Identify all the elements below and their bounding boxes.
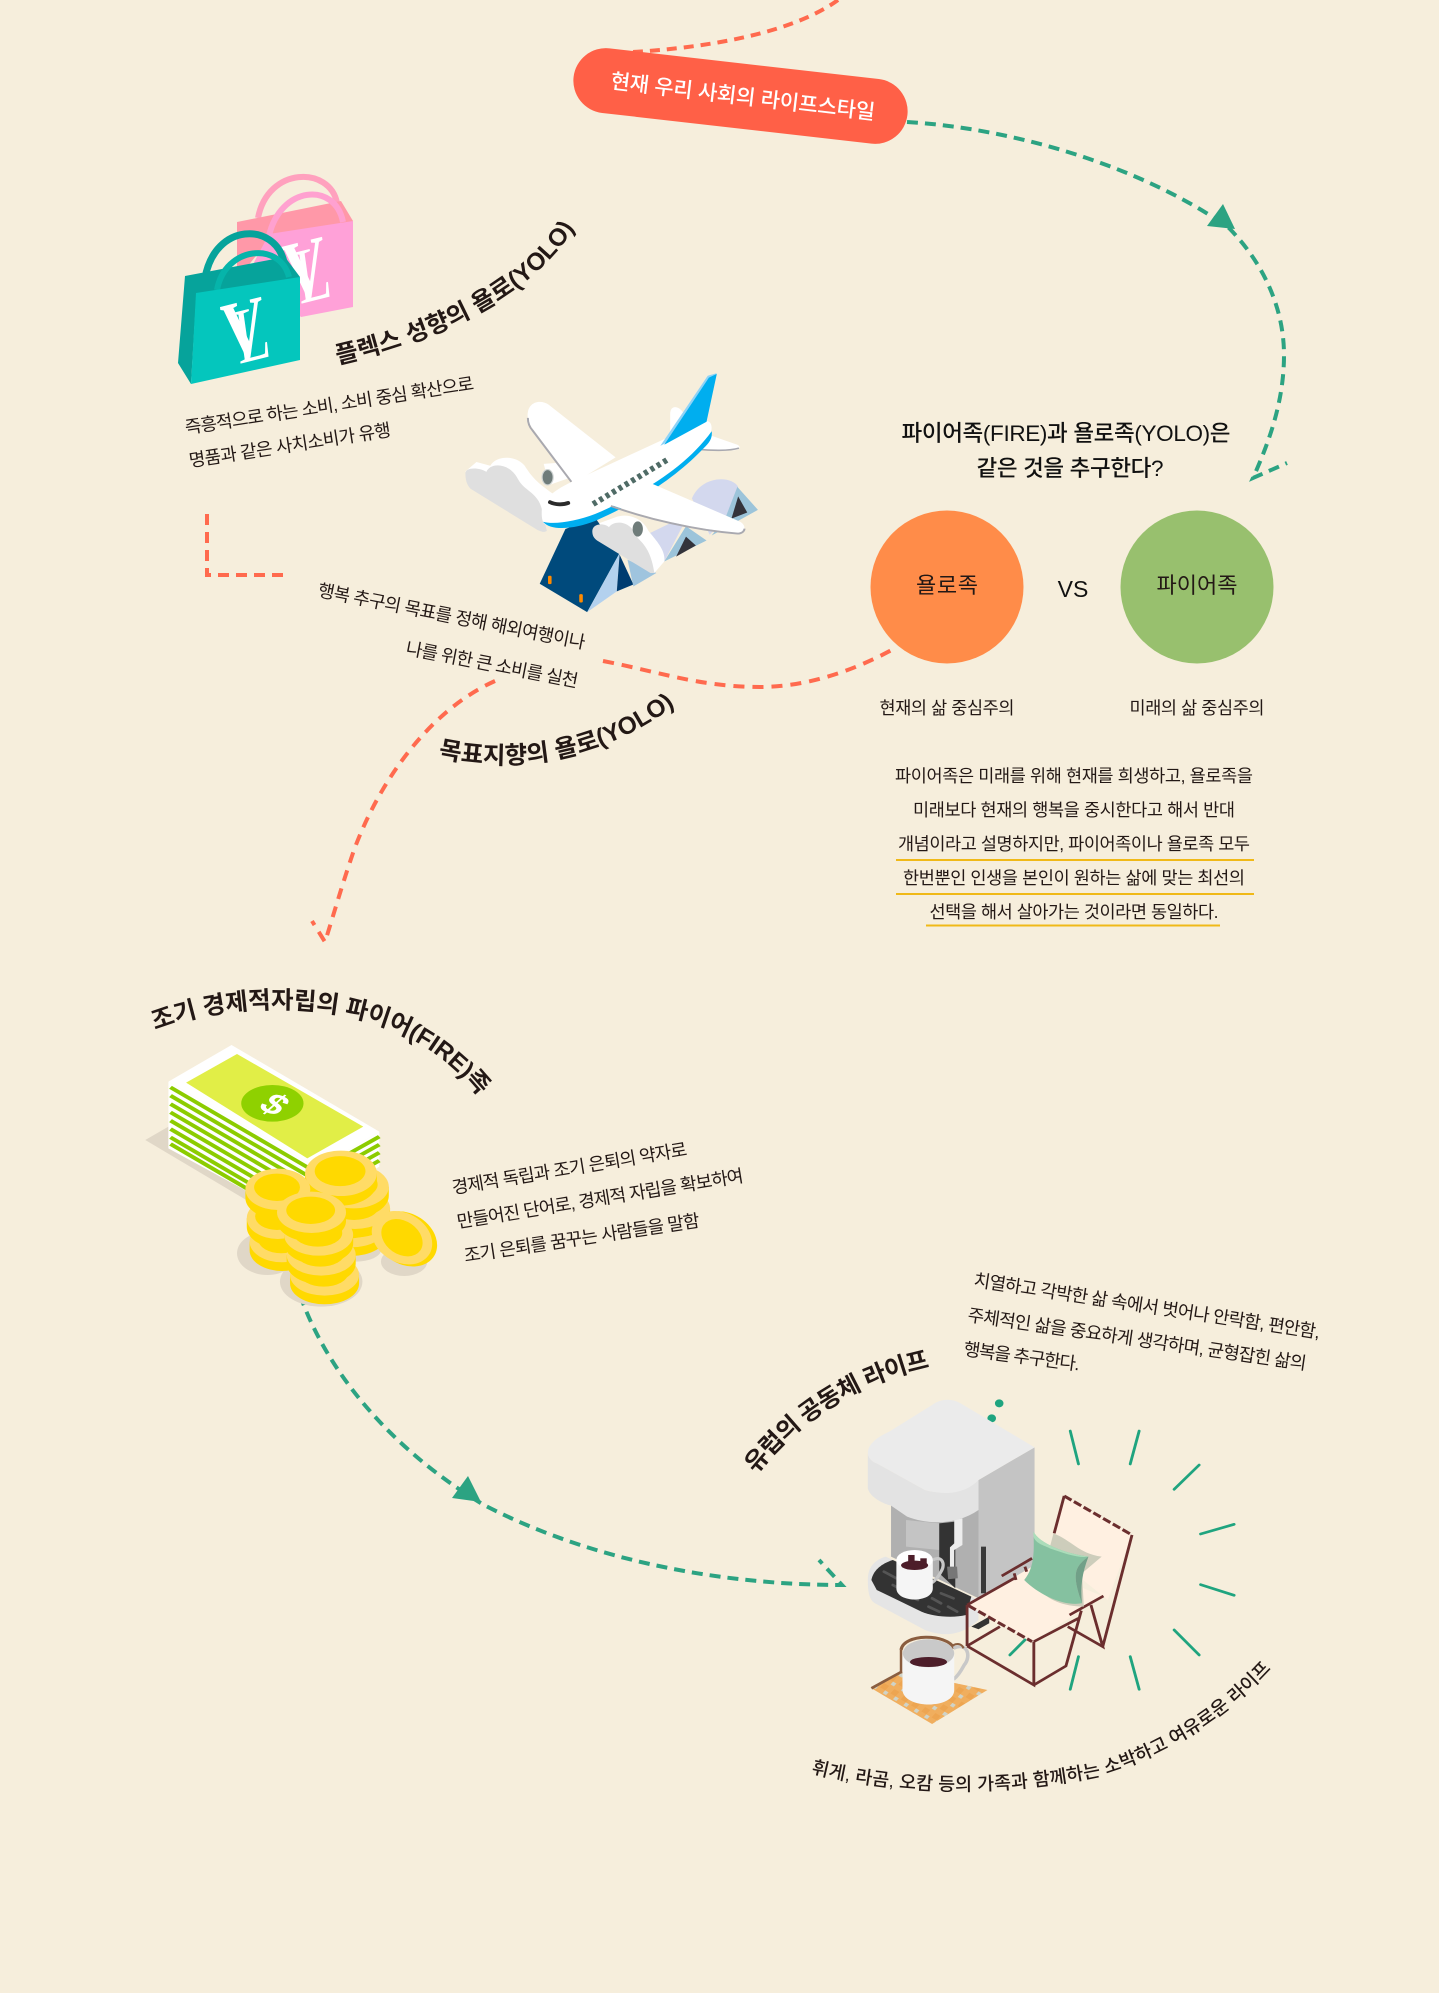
illustration: money stack and coins <box>145 1045 450 1307</box>
arrow: orange dashed curve toward fire section <box>312 681 495 942</box>
arrow: orange dashed curve from orange circle <box>603 647 897 687</box>
fire caption: 미래의 삶 중심주의 <box>1130 698 1264 718</box>
arrow: green dashed curve to comparison section <box>907 122 1287 478</box>
arrow: orange dashed line entering from top <box>633 0 838 52</box>
caption: hygge, lagom, ocamb: 휘게, 라곰, 오캄 등의 가족과 함께하는 소박하고 여유로운 라이프 <box>812 1660 1270 1792</box>
heading: fire: 조기 경제적자립의 파이어(FIRE)족 <box>151 988 492 1095</box>
text block: hygge description: 행복을 추구한다. <box>962 1339 1081 1374</box>
icon: luxury shopping bags: L <box>290 226 336 321</box>
heading: flex yolo: 플렉스 성향의 욜로(YOLO) <box>336 222 576 366</box>
illustration: money stack and coins: $ <box>250 1087 299 1122</box>
icon: luxury shopping bags: V <box>278 217 333 320</box>
icon: luxury shopping bags <box>178 177 353 384</box>
heading: comparison question <box>902 421 1230 481</box>
title pill: 현재 우리 사회의 라이프스타일 <box>609 70 876 124</box>
text block: goal yolo description: 나를 위한 큰 소비를 실천 <box>404 638 580 691</box>
text block: goal yolo description: 행복 추구의 목표를 정해 해외여행이나 <box>316 580 587 653</box>
text block: hygge description: 주체적인 삶을 중요하게 생각하며, 균형잡힌 삶의 <box>966 1305 1308 1374</box>
icon: luxury shopping bags: L <box>229 286 275 381</box>
text block: fire description: 만들어진 단어로, 경제적 자립을 확보하여 <box>455 1166 745 1232</box>
yolo caption: 현재의 삶 중심주의 <box>880 698 1014 718</box>
chair <box>1050 1496 1132 1600</box>
text block: fire description: 경제적 독립과 조기 은퇴의 약자로 <box>450 1139 688 1198</box>
illustration: coffee machine, chair and mug <box>868 1399 1234 1724</box>
text block: comparison paragraph: 파이어족은 미래를 위해 현재를 희생하고, 욜로족을 <box>895 766 1253 786</box>
text block: comparison paragraph <box>895 766 1254 926</box>
text block: comparison paragraph: 미래보다 현재의 행복을 중시한다고 해서 반대 <box>913 800 1235 820</box>
panel: fire circle <box>1120 510 1274 664</box>
text block: hygge description: 치열하고 각박한 삶 속에서 벗어나 안락함, 편안함, <box>972 1270 1321 1342</box>
text block: flex yolo description: 즉흥적으로 하는 소비, 소비 중심 확산으로 <box>184 374 475 438</box>
title pill <box>570 45 911 147</box>
arrow: green dashed curve to hygge section <box>300 1295 842 1585</box>
heading: comparison question: 파이어족(FIRE)과 욜로족(YOLO)은 <box>902 421 1230 446</box>
heading: goal yolo: 목표지향의 욜로(YOLO) <box>440 694 674 766</box>
vs label: VS <box>1058 576 1088 602</box>
icon: luxury shopping bags: V <box>217 277 272 380</box>
text block: comparison paragraph: 한번뿐인 인생을 본인이 원하는 삶에 맞는 최선의 <box>903 868 1245 888</box>
text block: flex yolo description: 명품과 같은 사치소비가 유행 <box>188 420 392 471</box>
panel: yolo circle: 욜로족 <box>916 573 978 598</box>
heading: comparison question: 같은 것을 추구한다? <box>976 456 1164 481</box>
illustration: airplane over tents and clouds <box>465 373 758 612</box>
text block: fire description <box>450 1139 745 1266</box>
arrow: orange dashed elbow <box>207 514 283 575</box>
panel: fire circle: 파이어족 <box>1156 573 1238 598</box>
mat <box>871 1672 987 1724</box>
rays <box>1010 1431 1234 1689</box>
text block: flex yolo description <box>184 374 475 471</box>
text block: comparison paragraph: 개념이라고 설명하지만, 파이어족이나 욜로족 모두 <box>898 834 1250 854</box>
text block: hygge description <box>962 1270 1321 1374</box>
panel: yolo circle <box>870 510 1024 664</box>
text block: fire description: 조기 은퇴를 꿈꾸는 사람들을 말함 <box>463 1211 701 1266</box>
text block: comparison paragraph: 선택을 해서 살아가는 것이라면 동일하다. <box>930 902 1218 922</box>
text block: goal yolo description <box>316 580 587 691</box>
heading: european community life: 유럽의 공동체 라이프 <box>745 1350 929 1471</box>
